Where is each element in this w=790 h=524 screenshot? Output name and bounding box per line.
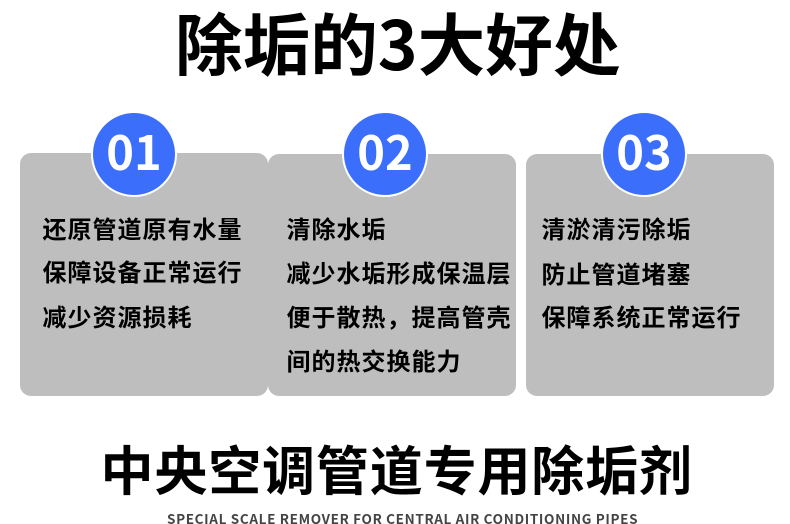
text: reduce resource loss: 减少资源损耗 [42, 298, 192, 333]
panel: benefit 1 [20, 153, 268, 396]
number badge 03 [601, 111, 687, 197]
text: reduce insulating scale layer: 减少水垢形成保温层 [286, 254, 512, 289]
text: prevent blockage: 防止管道堵塞 [542, 255, 692, 290]
number badge 02 [342, 111, 428, 197]
text: heat exchange capacity: 间的热交换能力 [286, 342, 462, 377]
text: restore water flow: 还原管道原有水量 [42, 210, 242, 245]
product heading: 中央空调管道专用除垢剂 [100, 430, 693, 506]
text: easier heat dissipation: 便于散热，提高管壳 [286, 298, 512, 333]
panel: benefit 2 [268, 154, 516, 396]
text: keep system running: 保障系统正常运行 [542, 298, 742, 333]
text: clear sludge and scale: 清淤清污除垢 [542, 210, 692, 245]
number badge 01: 01 [106, 115, 162, 184]
panel: benefit 3 [526, 154, 774, 396]
text: remove scale: 清除水垢 [286, 210, 386, 245]
number badge 01 [91, 111, 177, 197]
number badge 02: 02 [357, 115, 413, 184]
number badge 03: 03 [616, 115, 672, 184]
text: keep equipment running: 保障设备正常运行 [42, 253, 242, 288]
